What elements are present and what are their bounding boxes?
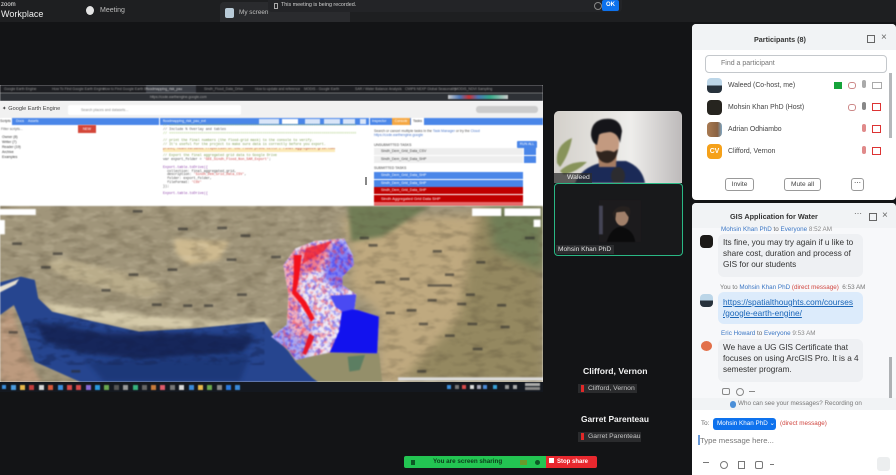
attendee: Clifford, Vernon (578, 366, 647, 393)
script tree: Owner (8) (2, 134, 18, 138)
video tile: Mohsin Khan (554, 183, 683, 256)
zoom workplace logo (1, 2, 43, 19)
message: Mohsin Khan: share cost, duration and process of (723, 249, 851, 258)
scripts filter: Filter scripts... (1, 127, 23, 131)
plant (557, 138, 587, 175)
sindh overlay (268, 235, 382, 365)
scripts tab header: Assets (28, 119, 39, 123)
indus delta (295, 353, 382, 383)
name label: Mohsin Khan PhD: Mohsin Khan PhD (558, 246, 611, 253)
invite button: Invite (732, 181, 747, 188)
mountain ridges (52, 212, 275, 305)
message composer: (direct message) (780, 420, 827, 427)
recording notice: OK (606, 2, 615, 8)
participant row: Clifford, Vernon: Clifford, Vernon (728, 148, 775, 155)
browser tabs: SAR / Water Balance Analysis (355, 87, 402, 91)
participant row: Mohsin Khan: Mohsin Khan PhD (Host) (728, 104, 804, 111)
tasks tab header (370, 118, 543, 124)
script tree: Writer (7) (2, 140, 17, 144)
script tree: Examples (2, 154, 17, 158)
video tile: Waleed (554, 111, 682, 183)
participants scrollbar (889, 73, 892, 138)
map labels (9, 210, 535, 373)
submitted tasks: Sindh Aggregated Grid Data SHP (381, 196, 440, 200)
scripts filter (0, 124, 97, 134)
message composer: Type message here... (700, 436, 774, 445)
panel: scripts (0, 118, 159, 206)
message: Mohsin Khan (700, 226, 863, 277)
submitted tasks (373, 166, 524, 206)
browser tabs: MODIS - Google Earth (304, 87, 339, 91)
participant row: Clifford, Vernon: CV (710, 148, 719, 155)
code text: folder: export_folder, (167, 177, 212, 181)
participant row: Adrian Odhiambo: Adrian Odhiambo (728, 126, 782, 133)
unsubmitted tasks: Sindh_Dem_Grid_Data_SHP (381, 156, 426, 160)
chat scrollbar (889, 357, 892, 398)
participant row: Clifford, Vernon (707, 144, 881, 159)
message: you: You to Mohsin Khan PhD (direct message) 6:53 AM (720, 284, 865, 291)
tasks description (374, 128, 480, 138)
code scrollbar (365, 177, 367, 185)
editor title bar: floodmapping_risk_pau_ext (163, 119, 206, 123)
tasks tab header: Inspector (372, 119, 386, 123)
browser address bar (0, 93, 543, 101)
search field (705, 55, 887, 73)
participant row: Waleed (707, 78, 882, 93)
code text (162, 123, 356, 196)
unsubmitted tasks: RUN ALL (520, 142, 534, 146)
participants header: Participants (8) (754, 35, 806, 44)
meeting tab (86, 6, 125, 15)
browser address bar: https://code.earthengine.google.com (150, 95, 207, 99)
code text: }); (163, 185, 169, 189)
script tree (2, 134, 22, 160)
code text: // print the final numbers (the flood-grid mask) to the console to verify. (163, 139, 314, 143)
arabian sea (0, 276, 318, 382)
tasks description: Search or cancel multiple tasks in the Task Manager or try the Cloud (374, 129, 480, 133)
code text: // It's useful for the project to make sure data is correctly before you export. (163, 143, 326, 147)
earth engine header (0, 101, 543, 118)
code text: Export.table.toDrive({ (163, 192, 208, 196)
message composer: Mohsin Khan PhD ⌄ (717, 420, 775, 427)
chat header (692, 203, 896, 228)
browser tabs: CMIP6 NEXP Global Seasonality (405, 87, 456, 91)
unsubmitted tasks: Sindh_Dem_Grid_Data_CSV (381, 149, 426, 153)
screen sharing bar (404, 456, 597, 468)
message composer: To: (701, 420, 709, 427)
chat header: ⋯ (854, 209, 862, 218)
person (575, 161, 645, 183)
recording notice (692, 398, 896, 410)
panel: code editor (160, 118, 369, 206)
script tree: Reader (19) (2, 144, 21, 148)
message: you (700, 284, 865, 324)
code text: // Include % Overlay and tables (163, 128, 226, 132)
mute all button: Mute all (791, 181, 814, 188)
message: you: /google-earth-engine/ (723, 308, 802, 318)
browser tabs: Google Earth Engine (4, 87, 36, 91)
attendee: Garret Parenteau: Garret Parenteau (588, 433, 641, 440)
participant row: Mohsin Khan (707, 100, 881, 115)
earth engine header: ✦ Google Earth Engine (2, 106, 60, 112)
unsubmitted tasks: UNSUBMITTED TASKS (374, 143, 411, 147)
more button (851, 178, 864, 191)
scripts filter: NEW (83, 127, 91, 131)
tasks description: https://code.earthengine.google (374, 133, 423, 137)
submitted tasks: Sindh_Dem_Grid_Data_SHP (381, 173, 426, 177)
participants header (692, 24, 896, 50)
code text: // ============================================================================================ (163, 124, 356, 128)
message: Eric Howard: Eric Howard to Everyone 9:53 AM (721, 330, 816, 337)
meeting tab: Meeting (100, 7, 125, 14)
browser tabs: How to Find Google Earth Engine (103, 87, 155, 91)
top bar (0, 0, 896, 22)
attendee: Garret Parenteau (578, 414, 649, 442)
send button (877, 457, 890, 471)
map (0, 205, 543, 382)
code text: collection: final_aggregated_grid, (167, 170, 236, 174)
panel: participants (692, 24, 896, 200)
windows taskbar (0, 382, 543, 392)
message: you: https://spatialthoughts.com/courses (723, 297, 853, 307)
tasks tab header: Tasks (413, 119, 422, 123)
scripts tab header: Scripts (0, 119, 11, 123)
zoom workplace logo: Workplace (1, 9, 43, 19)
invite button (725, 178, 754, 191)
more button: ⋯ (854, 180, 861, 187)
code text: var export_folder = 'GEE_Sindh_Flood_Non_SAR_Export'; (163, 158, 271, 162)
panel: tasks (370, 118, 543, 206)
stop share button (546, 456, 597, 468)
shared screen (0, 85, 543, 392)
chat header: GIS Application for Water (730, 212, 818, 221)
attendee: Clifford, Vernon: Clifford, Vernon (583, 366, 647, 376)
code text: Export.table.toDrive({ (163, 166, 208, 170)
browser tabs: MODIS_NDVI Sampling (455, 87, 492, 91)
message composer (692, 410, 896, 475)
scripts tab header (0, 118, 159, 124)
panel: chat (692, 203, 896, 475)
mute all button (784, 178, 821, 191)
unsubmitted tasks (374, 140, 538, 164)
submitted tasks: Sindh_Dem_Grid_Data_SHP (381, 188, 426, 192)
name label: Waleed: Waleed (567, 174, 590, 181)
script tree: Archive (2, 150, 14, 154)
browser tabs: How To Find Google Earth Engine (52, 87, 105, 91)
message reactions (722, 388, 755, 396)
zoom workplace logo: zoom (1, 2, 16, 8)
message: Eric Howard: focuses on using ArcGIS Pro. It is a 4 (723, 354, 859, 363)
browser tabs: floodmapping_risk_pau (146, 87, 182, 91)
message: Mohsin Khan: Its fine, you may try again if u like to (723, 238, 853, 247)
sharing status: You are screen sharing (433, 458, 502, 465)
composer tools (703, 461, 774, 469)
submitted tasks: Sindh_Dem_Grid_Data_SHP (381, 180, 426, 184)
chat header: × (882, 210, 888, 221)
participant row: Waleed: Waleed (Co-host, me) (728, 82, 795, 89)
code text: fileFormat: 'CSV' (167, 181, 202, 185)
message: Mohsin Khan: GIS for our students (723, 260, 796, 269)
sharing status (404, 456, 546, 468)
map controls (0, 208, 541, 234)
attendee: Clifford, Vernon: Clifford, Vernon (588, 385, 635, 392)
message: Eric Howard (701, 330, 863, 382)
name label: Waleed (554, 173, 592, 183)
tasks tab header: Console (395, 119, 407, 123)
participant row: Adrian Odhiambo (707, 122, 881, 137)
attendee: Garret Parenteau: Garret Parenteau (581, 414, 649, 424)
my screen tab: My screen (239, 9, 268, 16)
message: Mohsin Khan: Mohsin Khan PhD to Everyone 8:52 AM (721, 226, 832, 233)
my screen tab (220, 2, 350, 22)
code text: // ============================================================================================ (163, 132, 356, 136)
submitted tasks: SUBMITTED TASKS (374, 166, 406, 170)
browser tabs: Sindh_Flood_Data_Drive (204, 87, 243, 91)
browser tabs (0, 85, 543, 93)
stop share button: Stop share (557, 459, 588, 465)
editor title bar (160, 118, 369, 124)
recording notice (268, 0, 622, 12)
message: Eric Howard: semester program. (723, 365, 792, 374)
search field: Find a participant (721, 60, 775, 67)
message: Eric Howard: We have a UG GIS Certificate that (723, 343, 848, 352)
code text: // Export the final aggregated grid data to Google Drive (163, 154, 277, 158)
code text: description: 'Sindh_Dem_Grid_Data_CSV', (167, 173, 246, 177)
browser tabs: How to update and reference (255, 87, 300, 91)
recording notice: Who can see your messages? Recording on (738, 400, 862, 407)
scripts tab header: Docs (16, 119, 24, 123)
participants header: × (881, 32, 887, 43)
recording notice: This meeting is being recorded. (281, 2, 356, 8)
map attribution (398, 377, 543, 381)
land base (0, 205, 543, 383)
earth engine header: Search places and datasets... (81, 108, 128, 112)
